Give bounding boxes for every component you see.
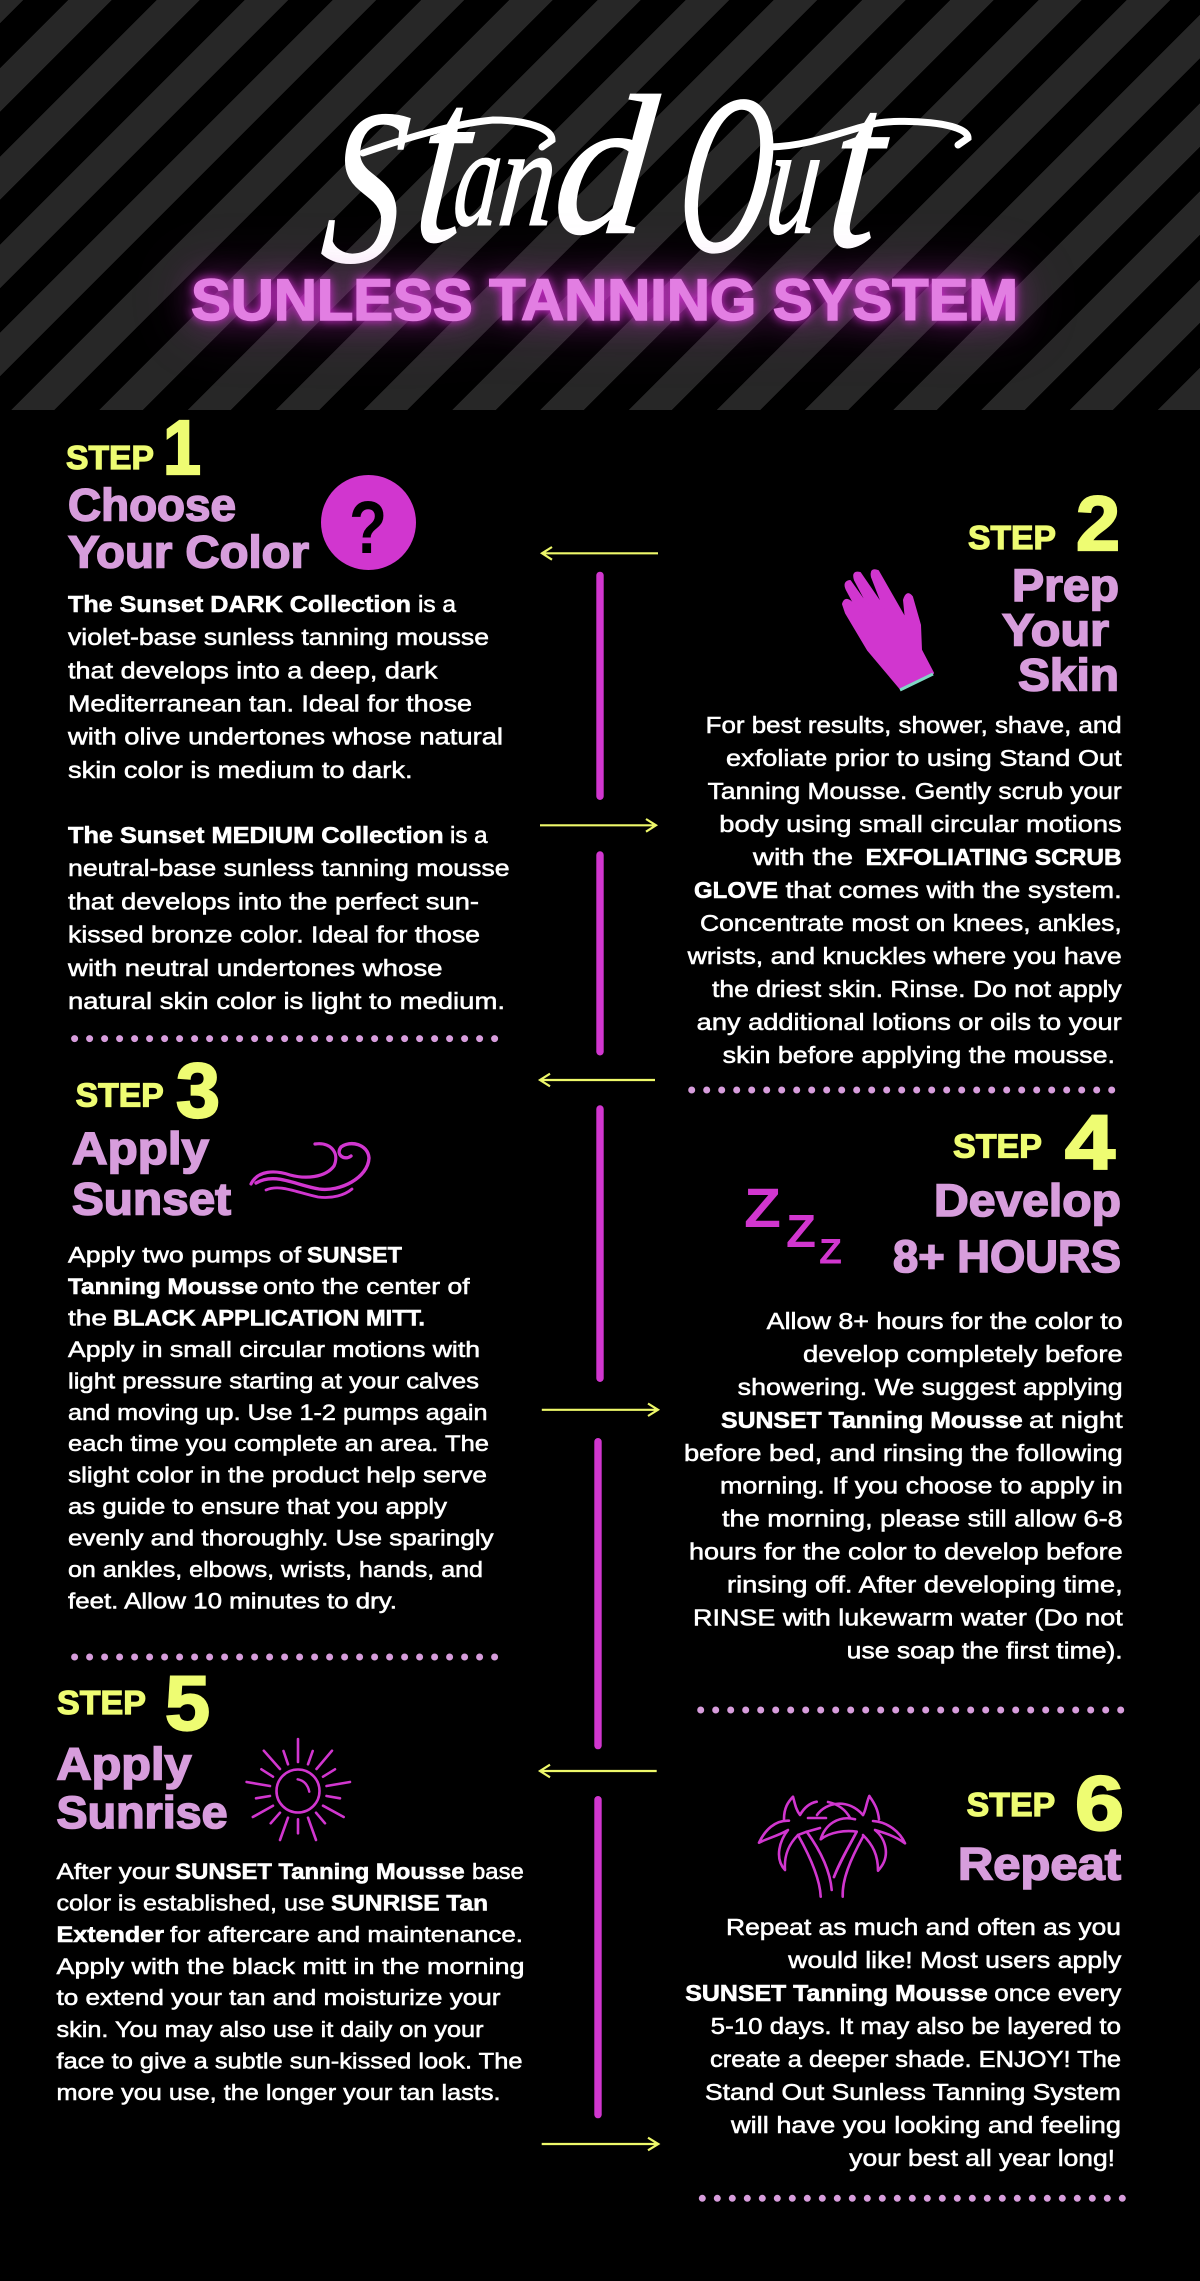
step 5 body text: Apply with the black mitt in the morning bbox=[56, 1954, 524, 1979]
step 4 body text bbox=[684, 1308, 1123, 1664]
step 4 body text: morning. If you choose to apply in bbox=[720, 1473, 1123, 1499]
icon: zzz: Z bbox=[744, 1176, 781, 1239]
step 3 body text: each time you complete an area. The bbox=[68, 1431, 489, 1456]
step 4 body text: at night bbox=[1029, 1407, 1123, 1433]
step 4 heading: 8+ HOURS bbox=[893, 1231, 1121, 1282]
step 4 body text: rinsing off. After developing time, bbox=[727, 1572, 1123, 1598]
divider: step 6 dots bbox=[702, 2195, 1123, 2202]
icon: question mark bbox=[321, 475, 416, 570]
step 5 label bbox=[57, 1661, 210, 1747]
step 1 body text: natural skin color is light to medium. bbox=[68, 988, 505, 1014]
title: O bbox=[668, 48, 787, 301]
step 1 body text: is a bbox=[418, 591, 456, 617]
step 4 heading: Develop bbox=[934, 1175, 1121, 1226]
step 3 body text: evenly and thoroughly. Use sparingly bbox=[68, 1526, 494, 1551]
step 5 body text: face to give a subtle sun-kissed look. The bbox=[56, 2048, 522, 2074]
step 6 body text: once every bbox=[994, 1980, 1122, 2006]
step 1 body text bbox=[67, 591, 510, 1014]
step 1 label: STEP bbox=[66, 440, 154, 477]
step 2 body text: Concentrate most on knees, ankles, bbox=[700, 910, 1122, 936]
step 3 body text: SUNSET bbox=[307, 1242, 403, 1267]
step 5 label: 5 bbox=[165, 1661, 210, 1747]
step 4 body text: hours for the color to develop before bbox=[689, 1539, 1123, 1565]
icon: question mark: ? bbox=[349, 486, 387, 569]
title: d bbox=[546, 55, 665, 276]
step 2 body text: that comes with the system. bbox=[786, 877, 1122, 903]
step 4 heading bbox=[893, 1175, 1121, 1282]
icon: glove bbox=[843, 570, 933, 690]
step 1 body text: neutral-base sunless tanning mousse bbox=[68, 855, 510, 881]
step 2 body text: wrists, and knuckles where you have bbox=[687, 943, 1122, 969]
step 3 body text: onto the center of bbox=[263, 1274, 471, 1299]
title: t bbox=[406, 32, 486, 292]
title bbox=[314, 32, 968, 309]
step 3 body text: BLACK APPLICATION MITT. bbox=[113, 1305, 425, 1330]
step 1 body text: that develops into a deep, dark bbox=[68, 657, 438, 683]
step 3 body text: Apply in small circular motions with bbox=[68, 1337, 480, 1362]
step 6 body text: would like! Most users apply bbox=[787, 1947, 1122, 1973]
step 6 label: STEP bbox=[967, 1787, 1055, 1824]
step 2 body text: skin before applying the mousse. bbox=[723, 1042, 1115, 1068]
icon: zzz: Z bbox=[786, 1205, 816, 1257]
step 3 body text: feet. Allow 10 minutes to dry. bbox=[68, 1589, 397, 1614]
step 2 body text: For best results, shower, shave, and bbox=[706, 712, 1122, 738]
icon: zzz bbox=[744, 1176, 842, 1272]
step 4 body text: before bed, and rinsing the following bbox=[684, 1440, 1123, 1466]
step 4 label: 4 bbox=[1065, 1100, 1115, 1186]
step 2 body text: with the bbox=[752, 844, 853, 870]
step 1 body text: with olive undertones whose natural bbox=[67, 724, 503, 750]
step 6 body text: Stand Out Sunless Tanning System bbox=[705, 2079, 1121, 2105]
step 3 label bbox=[76, 1048, 220, 1134]
step 6 label bbox=[967, 1761, 1124, 1847]
step 6 label: 6 bbox=[1075, 1761, 1124, 1847]
step 1 body text: The Sunset DARK Collection bbox=[68, 591, 411, 617]
arrow 2 bbox=[540, 819, 656, 832]
step 5 heading bbox=[56, 1738, 227, 1838]
step 5 heading: Sunrise bbox=[56, 1787, 227, 1838]
step 4 body text: use soap the first time). bbox=[847, 1638, 1123, 1664]
step 4 body text: SUNSET Tanning Mousse bbox=[721, 1407, 1023, 1433]
step 6 body text: 5-10 days. It may also be layered to bbox=[711, 2013, 1121, 2039]
step 4 body text: develop completely before bbox=[803, 1341, 1123, 1367]
step 3 body text: Tanning Mousse bbox=[68, 1274, 258, 1299]
icon: palm trees bbox=[759, 1796, 905, 1897]
step 1 label: 1 bbox=[163, 405, 201, 491]
step 3 body text: the bbox=[68, 1305, 107, 1330]
timeline bar 4 bbox=[594, 1442, 602, 1746]
title: n bbox=[493, 101, 565, 256]
step 3 body text: and moving up. Use 1-2 pumps again bbox=[68, 1400, 488, 1425]
step 1 body text: violet-base sunless tanning mousse bbox=[68, 624, 489, 650]
step 5 heading: Apply bbox=[56, 1738, 192, 1790]
step 3 body text: light pressure starting at your calves bbox=[68, 1368, 479, 1393]
step 2 body text: GLOVE bbox=[694, 877, 778, 903]
panel: step 6 bbox=[685, 1761, 1124, 2198]
step 5 body text: base bbox=[472, 1859, 524, 1884]
arrow 3 bbox=[540, 1074, 655, 1086]
step 6 body text: SUNSET Tanning Mousse bbox=[685, 1980, 988, 2006]
step 5 body text: After your bbox=[56, 1859, 170, 1884]
step 5 body text: for aftercare and maintenance. bbox=[170, 1922, 523, 1947]
step 5 body text: color is established, use bbox=[56, 1891, 324, 1916]
step 3 label: STEP bbox=[76, 1078, 164, 1114]
step 3 heading bbox=[72, 1123, 231, 1224]
timeline bar 3 bbox=[596, 1109, 604, 1378]
step 3 body text: on ankles, elbows, wrists, hands, and bbox=[68, 1557, 483, 1582]
step 4 body text: showering. We suggest applying bbox=[738, 1374, 1123, 1400]
step 5 body text bbox=[56, 1859, 524, 2105]
step 4 body text: the morning, please still allow 6-8 bbox=[722, 1506, 1123, 1532]
timeline bar 5 bbox=[594, 1800, 602, 2115]
step 2 label bbox=[968, 481, 1120, 567]
step 2 heading: Skin bbox=[1018, 650, 1119, 700]
step 1 body text: with neutral undertones whose bbox=[67, 955, 443, 981]
timeline bar 2 bbox=[596, 855, 604, 1052]
step 6 body text bbox=[685, 1914, 1122, 2171]
step 4 label bbox=[953, 1100, 1115, 1186]
step 6 body text: will have you looking and feeling bbox=[730, 2112, 1121, 2138]
step 2 body text: Tanning Mousse. Gently scrub your bbox=[708, 778, 1122, 804]
step 5 label: STEP bbox=[57, 1685, 146, 1722]
step 2 body text: any additional lotions or oils to your bbox=[697, 1009, 1122, 1035]
step 2 body text: the driest skin. Rinse. Do not apply bbox=[712, 976, 1122, 1002]
step 3 body text: as guide to ensure that you apply bbox=[68, 1494, 447, 1519]
center timeline bbox=[540, 547, 658, 2150]
step 5 body text: SUNSET Tanning Mousse bbox=[175, 1859, 465, 1884]
step 5 body text: SUNRISE Tan bbox=[331, 1891, 488, 1916]
arrow 4 bbox=[542, 1404, 658, 1416]
step 1 body text: skin color is medium to dark. bbox=[68, 757, 413, 783]
step 2 label: STEP bbox=[968, 520, 1056, 557]
step 1 body text: is a bbox=[450, 822, 488, 848]
icon: zzz: Z bbox=[819, 1232, 842, 1272]
divider: step 4 dots bbox=[701, 1706, 1121, 1714]
step 4 label: STEP bbox=[953, 1128, 1042, 1165]
step 3 body text: slight color in the product help serve bbox=[68, 1463, 487, 1488]
step 4 body text: Allow 8+ hours for the color to bbox=[767, 1308, 1123, 1334]
step 2 heading: Prep bbox=[1012, 560, 1119, 611]
step 6 heading: Repeat bbox=[958, 1838, 1121, 1890]
title: a bbox=[448, 101, 510, 256]
step 2 body text: body using small circular motions bbox=[719, 811, 1122, 837]
step 2 heading: Your bbox=[1002, 604, 1109, 656]
step 3 heading: Apply bbox=[72, 1123, 209, 1174]
step 2 body text: exfoliate prior to using Stand Out bbox=[726, 745, 1122, 771]
panel: step 2 bbox=[687, 481, 1122, 1090]
timeline bar 1 bbox=[596, 575, 604, 796]
title: t bbox=[818, 38, 900, 297]
step 1 body text: Mediterranean tan. Ideal for those bbox=[68, 690, 472, 716]
step 1 heading: Your Color bbox=[68, 526, 309, 578]
title: S bbox=[314, 64, 418, 309]
step 1 heading: Choose bbox=[68, 480, 236, 530]
step 6 body text: your best all year long! bbox=[849, 2145, 1115, 2171]
step 6 body text: Repeat as much and often as you bbox=[726, 1914, 1121, 1940]
divider: step 1 dots bbox=[75, 1035, 495, 1042]
step 1 body text: that develops into the perfect sun- bbox=[68, 888, 479, 914]
step 4 body text: RINSE with lukewarm water (Do not bbox=[693, 1605, 1123, 1631]
step 3 body text: Apply two pumps of bbox=[68, 1242, 302, 1267]
step 1 body text: kissed bronze color. Ideal for those bbox=[68, 922, 480, 948]
panel: step 5 bbox=[56, 1661, 524, 2105]
step 1 body text: The Sunset MEDIUM Collection bbox=[68, 822, 444, 848]
arrow 5 bbox=[540, 1765, 657, 1777]
step 3 heading: Sunset bbox=[72, 1174, 231, 1224]
panel: step 1 bbox=[66, 405, 510, 1039]
step 2 body text: EXFOLIATING SCRUB bbox=[866, 844, 1122, 870]
step 3 label: 3 bbox=[176, 1048, 220, 1134]
step 3 body text bbox=[68, 1242, 494, 1614]
step 5 body text: skin. You may also use it daily on your bbox=[56, 2017, 484, 2042]
divider: step 3 dots bbox=[75, 1654, 495, 1660]
subtitle: SUNLESS TANNING SYSTEM bbox=[191, 268, 1018, 333]
arrow 1 to 2 bbox=[542, 547, 658, 560]
step 2 label: 2 bbox=[1076, 481, 1120, 567]
step 2 heading bbox=[1002, 560, 1119, 700]
panel: step 3 bbox=[68, 1048, 495, 1657]
title: u bbox=[760, 95, 830, 267]
step 1 heading bbox=[68, 480, 309, 578]
panel: step 4 bbox=[684, 1100, 1123, 1710]
step 6 body text: create a deeper shade. ENJOY! The bbox=[710, 2046, 1121, 2072]
divider: step 2 dots bbox=[692, 1086, 1112, 1094]
step 2 body text bbox=[687, 712, 1122, 1068]
icon: sun bbox=[247, 1739, 350, 1840]
icon: wind bbox=[251, 1144, 369, 1198]
step 5 body text: Extender bbox=[56, 1922, 164, 1947]
arrow 6 bbox=[542, 2138, 658, 2150]
step 5 body text: more you use, the longer your tan lasts. bbox=[56, 2080, 500, 2105]
step 1 label bbox=[66, 405, 201, 491]
step 5 body text: to extend your tan and moisturize your bbox=[56, 1985, 500, 2010]
